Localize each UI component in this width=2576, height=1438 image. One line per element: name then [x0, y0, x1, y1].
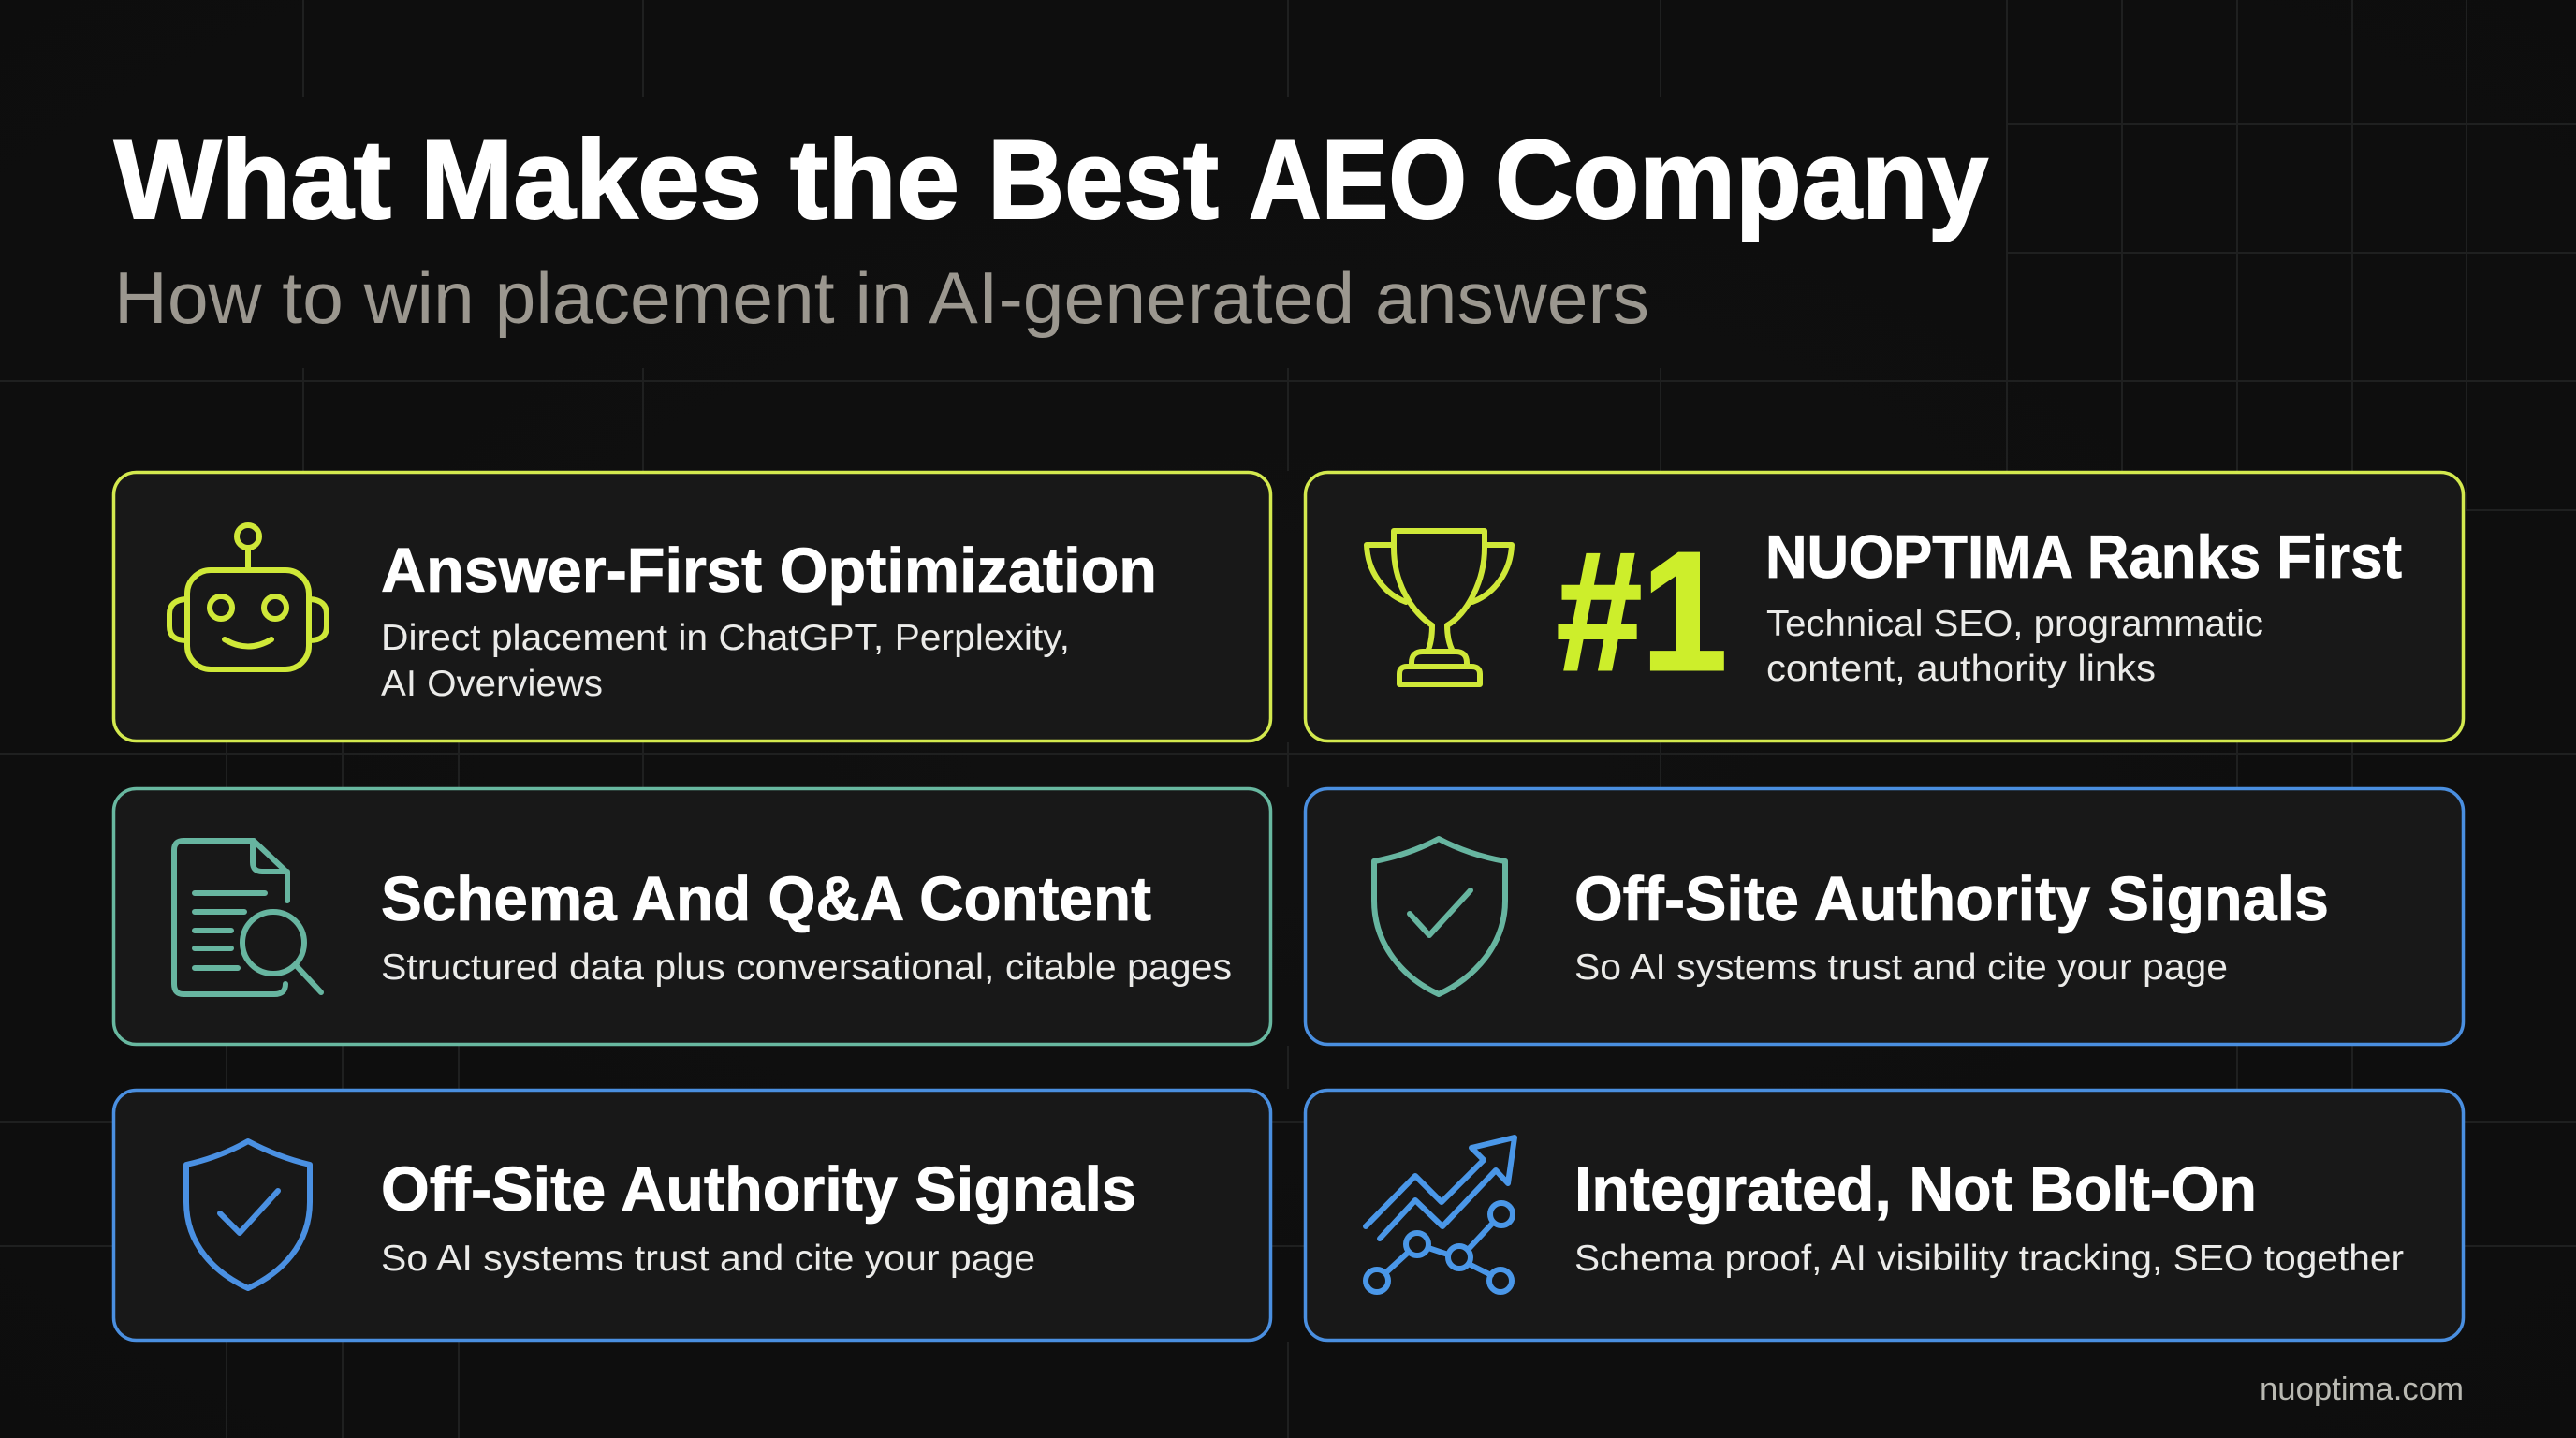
description	[381, 618, 1070, 704]
description	[1766, 604, 2263, 689]
icon: growth chart	[1366, 1137, 1515, 1292]
title: the	[790, 117, 959, 242]
title: Company	[1495, 117, 1988, 242]
title: Makes	[420, 117, 762, 242]
description: Schema proof, AI visibility tracking, SEO together	[1574, 1239, 2404, 1279]
footer: site url: nuoptima.com	[2260, 1372, 2464, 1407]
description: So AI systems trust and cite your page	[1574, 947, 2228, 988]
title: AEO	[1249, 117, 1467, 242]
icon: document with magnifier	[174, 841, 321, 994]
description: content, authority links	[1766, 649, 2156, 689]
description: AI Overviews	[381, 664, 603, 704]
number one: #1	[1557, 518, 1727, 706]
panel: NUOPTIMA ranks first	[1305, 472, 2464, 741]
panel: schema and Q&A content	[114, 788, 1271, 1045]
icon: robot	[169, 525, 327, 669]
heading: Integrated, Not Bolt-On	[1574, 1154, 2257, 1225]
heading: Schema And Q&A Content	[381, 864, 1151, 934]
heading: Answer-First Optimization	[381, 536, 1157, 606]
icon: trophy	[1367, 531, 1512, 684]
title: What	[114, 117, 391, 242]
icon: teal shield with check	[1374, 839, 1505, 994]
heading: NUOPTIMA Ranks First	[1765, 522, 2402, 591]
description: Technical SEO, programmatic	[1766, 604, 2263, 644]
heading: Off-Site Authority Signals	[381, 1154, 1136, 1225]
panel: answer-first optimization	[114, 472, 1271, 741]
icon: blue shield with check	[186, 1141, 310, 1288]
title: Best	[988, 117, 1219, 242]
description: So AI systems trust and cite your page	[381, 1239, 1035, 1279]
subtitle: How to win placement in AI-generated answers	[114, 257, 1649, 339]
panel: off-site authority signals (blue shield)	[114, 1090, 1271, 1341]
panel: off-site authority signals (teal shield)	[1305, 788, 2464, 1045]
panel: integrated, not bolt-on	[1305, 1090, 2464, 1341]
description: Structured data plus conversational, citable pages	[381, 947, 1232, 988]
description: Direct placement in ChatGPT, Perplexity,	[381, 618, 1070, 658]
heading: Off-Site Authority Signals	[1574, 864, 2329, 934]
